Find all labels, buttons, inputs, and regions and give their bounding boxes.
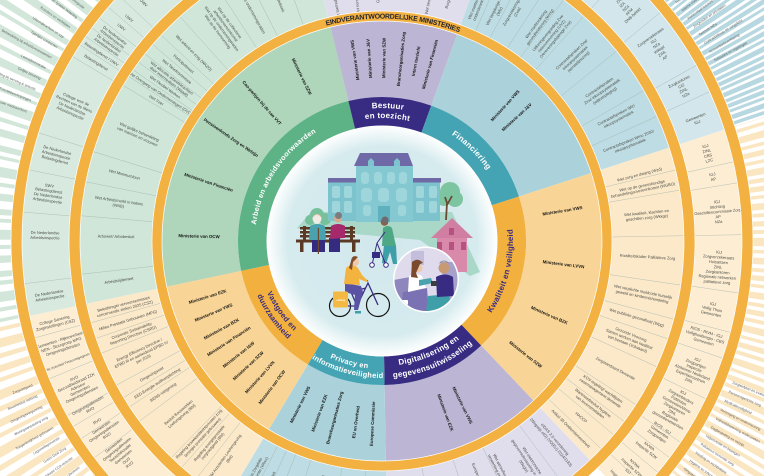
text block: supervisors of Arbeid: UWV [124, 13, 135, 23]
text block: supervisors of Kwaliteit: dementienetwerken [652, 409, 685, 431]
icon: woman on bicycle: +Jong [336, 298, 345, 302]
text block: supervisors of Kwaliteit: Inspectie SZW [635, 440, 658, 460]
text block: ministries of Arbeid [178, 57, 313, 239]
text block: laws of Vastgoed: Leefomgeving (Bbl) [167, 402, 197, 429]
text block: supervisors of Vastgoed: Omgevingsdiensten [45, 342, 80, 357]
text block: supervisors of Kwaliteit: LZC [705, 157, 714, 164]
text block: supervisors of Kwaliteit: AP [715, 214, 721, 219]
text block: supervisors of Vastgoed: RVO [125, 460, 134, 469]
text block: supervisors of Arbeid: Arbeidsinspectie [56, 105, 85, 121]
text block: outer rows top right: Subsidies en regelingen [713, 41, 748, 62]
text block: ministries of Vastgoed: Ministerie van EZK [188, 288, 228, 305]
text block: ministries of Vastgoed: Ministerie van LVVN [244, 360, 276, 394]
text block: laws of Financiering: risicoverevening (UVZ) [537, 18, 567, 53]
text block: laws of Arbeid: arbeidsovereenkomst [212, 9, 240, 43]
text block: outer rows bottom left: Green Deal Zorg [43, 446, 67, 464]
text block: outer rows bottom right: Valpreventie en bewegen [705, 434, 741, 458]
icon: pink house [431, 218, 473, 272]
text block: supervisors of Kwaliteit: RIOS - IGJ [653, 420, 672, 435]
text block: outer rows bottom right: Dagbesteding en welzijn [710, 425, 745, 448]
text block: ministries of Privacy: Brancheorganisaties Zorg [325, 391, 344, 445]
text block: laws of Vastgoed: concernende zieken 2025 (CSZ) [96, 299, 154, 318]
text block: laws of Arbeid [94, 0, 309, 285]
text block: supervisors of Kwaliteit: AP [710, 176, 717, 182]
text block: supervisors of Vastgoed: Gemeenten [91, 419, 111, 435]
text block: supervisors of Financiering: CIZ [677, 82, 686, 90]
text block: supervisors of Financiering: Gemeenten [685, 111, 706, 123]
text block: supervisors of Vastgoed: College Sanering [39, 314, 70, 326]
text block: ministries of Kwaliteit: Ministerie van LVVN [542, 259, 585, 269]
text block: supervisors of Kwaliteit: NVWA [643, 440, 656, 452]
text block: supervisors of Vastgoed: Toezichthouder [108, 442, 133, 464]
text block: laws of Financiering: (eerstelijnszorg) [566, 49, 591, 73]
text block: supervisors of Vastgoed: Gemeenten [104, 437, 123, 454]
text block: supervisors of Kwaliteit: IGJ [702, 143, 709, 149]
text block: supervisors of Financiering: ZINL [657, 48, 668, 58]
heading: Privacy en informatieveiligheid: informatieveiligheid [312, 354, 383, 378]
text block: laws of Digitalisering: (Wegwijs eID) (VO(EU) 2024/1183) [529, 417, 574, 468]
text block: supervisors of Arbeid: De Nederlandse [58, 100, 87, 117]
text block: supervisors of Arbeid: Belastingdienst / UWV [84, 41, 120, 67]
text block: ministries of Vastgoed: Ministerie van OCW [257, 368, 287, 405]
icon: woman on bicycle [330, 256, 390, 316]
icon: main building [328, 153, 441, 222]
text block: supervisors of Arbeid: Arbeidsinspectie [35, 293, 65, 303]
text block: ministries of Financiering: Ministerie van J&V [501, 102, 533, 132]
text block: supervisors of Kwaliteit: ZINL [702, 147, 712, 154]
heading: Kwaliteit en veiligheid: Kwaliteit en veiligheid [487, 230, 514, 313]
text block: laws of Vastgoed: (energie prestatie gebouwen) [183, 416, 222, 458]
text block: laws of Kwaliteit: Samen werken aan kwaliteit [605, 327, 654, 351]
text block: laws of Vastgoed: BENG-wetgeving [149, 381, 177, 403]
text block: ministries of Bestuur: Ministerie van SZW [381, 37, 387, 78]
text block: outer rows top left: Behandeling bij arbeidsvoorwaarden [1, 29, 52, 60]
text block: outer rows top right [569, 0, 748, 62]
text block: outer rows top left: Uitzendkrachten en zzp [32, 16, 65, 39]
text block: supervisors of Arbeid: Arbeidsinspectie [32, 196, 63, 205]
text block: supervisors of Arbeid: De Nederlandse [102, 25, 128, 46]
text block: laws of Kwaliteit: KOV-regeling/ wachtlijsten [582, 374, 624, 404]
text block: supervisors of Arbeid: UWV [116, 22, 127, 32]
text block: supervisors of Arbeid: De Nederlandse [31, 230, 60, 235]
text block: supervisors of Kwaliteit: ZINL [684, 376, 695, 385]
heading: Digitalisering en gegevensuitwisseling: Digitalisering en [398, 336, 459, 365]
text block: outer rows top left [0, 0, 172, 114]
text block: supervisors of Kwaliteit: ZINL [714, 264, 723, 270]
text block: ministries of Arbeid: Ministerie van Financiën [184, 172, 234, 193]
text block: supervisors of Vastgoed: AFM, Autoriteit Persoonsgegevens [42, 351, 93, 373]
text block: supervisors of Kwaliteit: Zorgaanbieders [668, 388, 695, 405]
text block: laws of Vastgoed [95, 294, 246, 476]
heading: Financiering: Financiering [452, 130, 490, 170]
text block: outer rows top left: Gelijke beloning [17, 66, 41, 81]
icon: woman with rollator [370, 216, 397, 267]
heading: Vastgoed en duurzaamheid: duurzaamheid [258, 294, 292, 339]
text block: supervisors of Kwaliteit: Veilig Thuis [702, 304, 723, 313]
text block: supervisors of Kwaliteit [609, 142, 742, 476]
text block: laws of Arbeid: Wet Overgang van Ondernemingen (OVO) [128, 70, 194, 117]
text block: outer rows top left: Tijdelijke contracten [30, 30, 58, 49]
text block: laws of Arbeid: Wet op de loonvorming [204, 14, 232, 50]
text block: ministries of Digitalisering: Ministerie van EZK [436, 393, 455, 433]
text block: ministries of Vastgoed: Ministerie van I&W [222, 340, 256, 369]
text block: supervisors of Kwaliteit: Zorgpartijen [647, 428, 667, 444]
text block: supervisors of Financiering: NZa [681, 90, 691, 99]
text block: laws of Financiering: gezondheidszorg (Wmg) [525, 7, 555, 46]
text block: laws of Arbeid: (WAB) [112, 202, 125, 209]
text block: supervisors of Kwaliteit: Regionale [661, 410, 680, 423]
text block: ministries of Kwaliteit [508, 205, 585, 369]
text block: supervisors of Financiering: DNB-beleid [623, 7, 642, 24]
text block: laws of Kwaliteit: HACCP [574, 411, 588, 424]
text block: laws of Arbeid: Wet Arbeidsmarkt in balans [95, 195, 143, 207]
text block: laws of Kwaliteit: Wet zorg en dwang (Wzd) [617, 166, 663, 183]
text block: laws of Financiering: inkoopsystematiek [614, 137, 646, 154]
text block: laws of Kwaliteit: Wet verplichte meldcode huiselijk [614, 283, 673, 300]
text block: outer rows top right: Tarieven NZa [698, 22, 718, 37]
text block: supervisors of Vastgoed [34, 313, 145, 476]
text block: outer rows bottom left: Toegankelijkheid gebouwen [15, 426, 54, 451]
text block: ministries of Bestuur: Brancheorganisaties Zorg [396, 31, 406, 86]
icon: tree [437, 182, 463, 220]
text block: laws of Vastgoed: Omgevingswet [139, 365, 165, 383]
text block: supervisors of Kwaliteit: Gemeenten/Wmo [662, 395, 692, 415]
text block: outer rows bottom right [657, 381, 764, 476]
text block: supervisors of Vastgoed: DUS [121, 456, 131, 465]
text block: supervisors of Financiering: AP [661, 54, 669, 61]
text block: supervisors of Financiering: AFM [624, 7, 634, 17]
text block: laws of Vastgoed: Milieu Prestatie Gebouwen (MPG) [98, 308, 158, 332]
text block: supervisors of Financiering: Zorgverzekeraars [636, 26, 665, 48]
text block: ministries of Digitalisering: Ministerie van VWS [451, 386, 474, 425]
text block: supervisors of Kwaliteit: NZa [715, 219, 723, 224]
heading: Digitalisering en gegevensuitwisseling: gegevensuitwisseling [393, 341, 472, 380]
text block: ministries of Privacy: Europese Commissie [369, 401, 376, 446]
text block: laws of Financiering: Zvw/ inkoopsystematiek [583, 77, 621, 105]
text block: supervisors of Kwaliteit: IGJ [624, 467, 632, 475]
text block: laws of Kwaliteit: Artikel 35 Ondiensteneenheid [550, 408, 591, 449]
text block: ministries of Bestuur: Ministerie van J&V [365, 39, 373, 78]
icon: bench with elderly couple [296, 212, 360, 254]
text block: supervisors of Kwaliteit: NVWA [629, 458, 641, 470]
text block: outer rows bottom right: Voeding en vochtbalans [694, 451, 728, 475]
text block: supervisors of Kwaliteit: Zorgverzekeraars [703, 253, 735, 261]
text block: supervisors of Kwaliteit: Inspectie [686, 363, 703, 374]
text block: laws of Arbeid: Participatiewet [172, 53, 196, 75]
text block: ministries of Financiering: Ministerie van VWS [490, 89, 521, 122]
heading: Privacy en informatieveiligheid: Privacy en [330, 354, 368, 368]
text block: laws of Kwaliteit: casemanagement dementie [579, 377, 623, 409]
text block: supervisors of Vastgoed: Gemeenten - Rijksoverheid [36, 330, 84, 350]
text block: supervisors of Kwaliteit: Regionale netwerken [698, 273, 736, 281]
text block: supervisors of Vastgoed: Gemeenten [69, 384, 90, 397]
text block: laws of Vastgoed: Reporting Directive (CSRD) [109, 324, 158, 346]
text block: laws of Vastgoed: Corporate Sustainability [111, 321, 152, 340]
text block: supervisors of Financiering [610, 0, 708, 128]
text block: supervisors of Arbeid: SWV [45, 182, 54, 189]
icon: left bush [305, 208, 331, 225]
text block: supervisors of Financiering: IGJ [649, 37, 657, 45]
text block: laws of Financiering: Wet marktordening [524, 9, 548, 39]
text block: supervisors of Kwaliteit: Gemeenten [693, 336, 714, 347]
text block: laws of Kwaliteit: Wet kwaliteit, klachten en [624, 208, 669, 217]
text block: laws of Digitalisering: (Wegiz) [518, 459, 530, 474]
text block: supervisors of Kwaliteit: RIOS - RIVM - IGJ [690, 325, 723, 339]
text block: laws of Financiering: Contractafspraken Wlz/ [597, 103, 636, 127]
text block: laws of Vastgoed: Besluit Bouwwerken [163, 399, 194, 426]
ring: orange ministries ring [157, 16, 607, 466]
panel: outer list of stripes, teal top right [665, 0, 764, 126]
text block: supervisors of Kwaliteit: Veiligheidsregio - CBS [685, 329, 725, 345]
text block: laws of Financiering: (Wlz) [495, 5, 504, 17]
heading: Bestuur en toezicht [365, 102, 410, 121]
text block: ministries of Vastgoed: Ministerie van VWS [194, 302, 233, 323]
text block: laws of Financiering: Contractafspraken [584, 76, 614, 99]
text block: supervisors of Vastgoed: Adviseur [70, 381, 87, 392]
text block: supervisors of Arbeid: De Nederlandse [34, 288, 64, 298]
text block: outer rows bottom right: Palliatieve terminale zorg [700, 442, 735, 467]
text block: ministries of Bestuur: Ministerie van VWS [349, 40, 360, 80]
text block: laws of Arbeid: Wet allocatie arbeidskrachten [150, 60, 194, 96]
text block: ministries of Privacy: Ministerie van EZK [310, 393, 329, 432]
text block: laws of Arbeid: Wet arbeid en zorg (WAZO) [175, 34, 214, 73]
text block: laws of Kwaliteit: van bestaan (Volwaard) [607, 334, 649, 354]
text block: ministries of Kwaliteit: Ministerie van VWS [542, 205, 583, 217]
text block: laws of Vastgoed: (Bal) [225, 453, 234, 464]
text block: outer rows bottom right: Vrijheidsbeperking onderzoeken [715, 417, 761, 444]
text block: laws of Kwaliteit: Kwaliteitskader Palliatieve Zorg [620, 253, 675, 261]
text block: outer rows bottom left [7, 383, 156, 476]
text block: supervisors of Vastgoed: NEN - Stuurgroep MPG [41, 336, 82, 353]
text block: laws of Arbeid: Wet Flexibel Werken [149, 74, 182, 100]
text block: supervisors of Arbeid: De Nederlandse [43, 144, 72, 156]
text block: supervisors of Vastgoed: RVO [69, 374, 79, 382]
heading: Eindverantwoordelijke ministeries: EINDVERANTWOORDELIJKE MINISTERIES [326, 14, 460, 32]
text block: laws of Arbeid: Wet op de ondernemingsraden [203, 5, 240, 52]
text block: laws of Arbeid: Arbowet/ Arbobesluit [98, 234, 135, 239]
text block: ministries of Digitalisering [436, 386, 474, 433]
text block: supervisors of Kwaliteit: IGJ [709, 171, 716, 177]
text block: supervisors of Arbeid: Rechten van de Mens [55, 94, 93, 114]
text block: supervisors of Kwaliteit: IGJ [694, 356, 701, 363]
text block: supervisors of Financiering: Wkkgz [653, 44, 666, 55]
text block: supervisors of Kwaliteit: IGJ [714, 199, 720, 204]
panel: outer list of stripes, green left [0, 0, 100, 322]
panel: central circle [266, 126, 498, 356]
text block: laws of Privacy [240, 453, 359, 476]
text block: outer rows top right: Zorgkosten en prestaties [692, 3, 727, 29]
text block: laws of Arbeid: Wet Vzer [148, 94, 165, 107]
text block: laws of Digitalisering: Wet elektronische [521, 446, 543, 475]
text block: supervisors of Kwaliteit: Geschillencommissie Zorg [694, 207, 741, 216]
text block: outer rows top left: Loonadministratie [20, 54, 47, 70]
text block: outer rows bottom left: Woningaanpassing zorg [14, 416, 49, 437]
text block: laws of Kwaliteit: Warenwetbesluit hygiëne [574, 387, 612, 418]
text block: supervisors of Kwaliteit: IGJ [679, 389, 687, 396]
icon: inset circle nurse with patient [393, 246, 460, 313]
text block: ministries of Privacy [289, 385, 376, 446]
text block: laws of Financiering: (wijkverpleging) [592, 85, 618, 106]
text block: laws of Bestuur [326, 0, 463, 21]
text block: supervisors of Kwaliteit: CBS [703, 152, 713, 159]
text block: laws of Kwaliteit: Zorgstandaard Dementie [595, 356, 637, 381]
text block: laws of Vastgoed: Regeling energieprestatie [193, 424, 226, 462]
text block: supervisors of Kwaliteit: Gemeenten [700, 309, 722, 318]
text block: laws of Financiering: (Vereveningsbijdrage Zvw) [538, 19, 573, 59]
text block: laws of Arbeid: Wet gelijke behandeling [119, 121, 160, 143]
text block: laws of Kwaliteit: Wet op de geneeskundige [619, 178, 665, 193]
text block: ministries of Vastgoed: Ministerie van Financiën [206, 325, 252, 357]
text block: outer rows bottom left: Legionellapreventie [32, 436, 60, 455]
text block: outer rows bottom right: Medicatieveiligheid [724, 399, 752, 415]
text block: supervisors of Kwaliteit: Zorgpartijen [685, 357, 707, 370]
text block: laws of Vastgoed: per 2026 [135, 353, 152, 364]
text block: supervisors of Financiering: ZINL [678, 86, 689, 95]
text block: outer rows bottom left: Omgevingsvergunning [10, 405, 43, 424]
text block: ministries of Arbeid: Cao-partijen bij de cao VVT [241, 80, 283, 126]
illustration: care campus [296, 153, 480, 316]
text block: laws of Arbeid: door intermediairs (Waadi) [149, 65, 190, 98]
text block: laws of Digitalisering [405, 414, 578, 476]
heading: Arbeid en arbeidsvoorwaarden: Arbeid en arbeidsvoorwaarden [251, 130, 316, 225]
heading: Bestuur en toezicht: Bestuur [372, 102, 404, 110]
text block: laws of Kwaliteit: van levensmiddelen [575, 394, 606, 420]
text block: ministries of Financiering [490, 89, 533, 132]
text block: supervisors of Arbeid: Arbeidsinspectie [99, 28, 126, 50]
text block: supervisors of Financiering: Zorgkantoren [667, 74, 691, 89]
text block: supervisors of Vastgoed: RVO [102, 431, 112, 440]
text block: ministries of Privacy: EU en Overheid [351, 405, 361, 439]
text block: supervisors of Kwaliteit: Patiënten [670, 394, 688, 407]
text block: laws of Digitalisering: eIDAS 2.0 verordening [540, 422, 570, 456]
text block: supervisors of Arbeid: De Nederlandse [96, 33, 122, 54]
text block: laws of Financiering: Contractafspraken Wmo 2030/ [602, 128, 655, 153]
text block: laws of Vastgoed: Beleidsregel vervoersemissies [97, 295, 150, 313]
text block: laws of Kwaliteit: Gezonde Voorzorg [615, 326, 648, 343]
text block: supervisors of Kwaliteit: Expertisecentrum [675, 368, 707, 385]
text block: supervisors of Kwaliteit: Gemeenten [650, 424, 670, 440]
text block: supervisors of Arbeid: Belastingdienst [83, 53, 110, 72]
text block: ministries of Bestuur: Ministerie van Financiën [421, 39, 439, 90]
text block: laws of Financiering [467, 0, 657, 158]
text block: laws of Vastgoed: EPBD III en aanleidend EPBD IV [114, 339, 169, 369]
text block: supervisors of Vastgoed: Omgevingsdiensten [71, 394, 104, 416]
ground [297, 212, 480, 276]
text block: supervisors of Arbeid: College voor de [62, 91, 90, 107]
text block: supervisors of Financiering: IGJ [693, 119, 701, 125]
text block: ministries of Bestuur: Intern toezicht [411, 45, 421, 76]
panel: outer list of stripes, orange left [0, 322, 94, 476]
text block: supervisors of Kwaliteit: Zorgkantoren [663, 400, 686, 416]
text block: laws of Kwaliteit [550, 166, 676, 449]
text block: laws of Vastgoed: zorgvastgoed (Bbl) [200, 431, 226, 461]
text block: laws of Financiering: inkoopsystematiek [603, 109, 634, 129]
text block: ministries of Arbeid: Pensioenfonds Zorg en Welzijn [203, 117, 260, 158]
text block: outer rows bottom left: Zorgvastgoed [12, 383, 33, 395]
text block: laws of Kwaliteit: Wet publieke gezondheid (Wpg) [609, 307, 665, 328]
text block: laws of Arbeid: Arbeidstijdenwet [104, 276, 135, 285]
text block: ministries of Bestuur [349, 31, 439, 90]
text block: outer rows top left: Roosters en werktijden [40, 6, 71, 29]
text block: ministries of Kwaliteit: Ministerie van SZW [508, 340, 544, 369]
text block: supervisors of Financiering: IZA [618, 0, 626, 9]
text block: laws of Kwaliteit: geschillen zorg (Wkkgz) [626, 213, 669, 222]
text block: outer rows bottom left: Bouwbesluit toetsing [7, 394, 38, 411]
text block: laws of Financiering: inkoopsystematiek [561, 45, 589, 71]
text block: supervisors of Financiering: NZa [621, 3, 631, 13]
text block: laws of Arbeid: van mannen en vrouwen [116, 125, 158, 147]
text block: laws of Arbeid: Wet Minimumloon [108, 168, 141, 181]
text block: supervisors of Kwaliteit: IGJ [710, 301, 717, 307]
text block: supervisors of Arbeid [30, 0, 149, 303]
text block: laws of Financiering: Contractafspraken Zvw/ [554, 38, 589, 71]
text block: supervisors of Kwaliteit: palliatieve zorg [703, 279, 730, 285]
text block: supervisors of Vastgoed: Gezondheidsraad ZZK [57, 371, 96, 393]
text block: supervisors of Kwaliteit: Stichting [709, 203, 725, 210]
text block: supervisors of Kwaliteit: Huisartsen [709, 259, 728, 265]
text block: supervisors of Arbeid: De Nederlandse [33, 191, 64, 200]
text block: supervisors of Arbeid: Belastingdienst [41, 154, 70, 166]
text block: ministries of Vastgoed: Ministerie van BZK [203, 317, 241, 341]
text block: supervisors of Financiering: NZa [652, 41, 662, 50]
text block: supervisors of Arbeid: Belastingdienst [35, 186, 63, 195]
text block: laws of Financiering: (Zvw) [512, 6, 522, 17]
text block: ministries of Privacy: Ministerie van VWS [289, 385, 311, 424]
text block: supervisors of Vastgoed: Omgevingsdiensten [88, 419, 120, 443]
text block: supervisors of Vastgoed: RVO [85, 405, 95, 414]
text block: supervisors of Vastgoed: Gemeenten [114, 448, 133, 465]
text block: supervisors of Kwaliteit: IGJ [716, 249, 722, 255]
text block: ministries of Kwaliteit: Ministerie van BZK [530, 305, 569, 326]
text block: outer rows bottom right: Verzorging en ondersteuning [719, 408, 761, 431]
text block: supervisors of Vastgoed: Zorginstellingen (CSZ) [36, 318, 76, 332]
text block: laws of Vastgoed: Energy Efficiency Directive / [116, 337, 163, 363]
heading: Bestuur en toezicht: en toezicht [365, 112, 410, 121]
text block: laws of Vastgoed: Regeling bouwkwaliteitsprivaten zorg [174, 408, 223, 460]
text block: supervisors of Kwaliteit: Zorgkantoren [706, 269, 730, 275]
text block: outer rows top right: Contractinkoop en zorgplicht [703, 19, 743, 45]
text block: supervisors of Arbeid: Arbeidsinspectie [41, 149, 72, 161]
text block: ministries of Arbeid: Ministerie van OCW [178, 233, 221, 239]
panel: Privacy en informatieveiligheid [241, 340, 386, 476]
text block: laws of Arbeid: Wet Tariefcommissie [161, 58, 193, 86]
text block: laws of Arbeid: Wet op de collectieve [217, 6, 243, 39]
text block: supervisors of Kwaliteit: Alzheimer Nederland [674, 363, 711, 382]
text block: supervisors of Vastgoed: Omgevingsdiensten [65, 385, 99, 404]
text block: laws of Vastgoed: EED-Energie-auditverplichting [133, 367, 181, 400]
text block: supervisors of Arbeid: Arbeidsinspectie [30, 235, 60, 240]
text block: supervisors of Vastgoed: Omgevingsdiensten [102, 436, 132, 462]
text block: ministries of Vastgoed: Ministerie van SZW [232, 350, 265, 381]
text block: supervisors of Vastgoed: RVO [92, 417, 102, 425]
panel: outer list of stripes, orange right [672, 117, 764, 476]
text block: supervisors of Arbeid: Arbeidsinspectie [93, 36, 121, 58]
text block: ministries of Arbeid: Ministerie van SZW [291, 57, 313, 96]
text block: outer rows top right: Accountantsverklaring [708, 33, 740, 54]
text block: laws of Kwaliteit: geweld en kindermishandeling [615, 289, 669, 304]
text block: outer rows bottom right: Persoonsgerichte zorg [728, 390, 762, 408]
heading: Vastgoed en duurzaamheid: Vastgoed en [268, 290, 296, 331]
text block: laws of Kwaliteit: behandelingsovereenkomst (WGBO) [611, 181, 676, 199]
text block: supervisors of Kwaliteit: ZINL [667, 408, 678, 417]
text block: ministries of Vastgoed [188, 288, 287, 405]
text block: laws of Financiering: Uitkeringsvergoeding Zvw [531, 14, 564, 52]
